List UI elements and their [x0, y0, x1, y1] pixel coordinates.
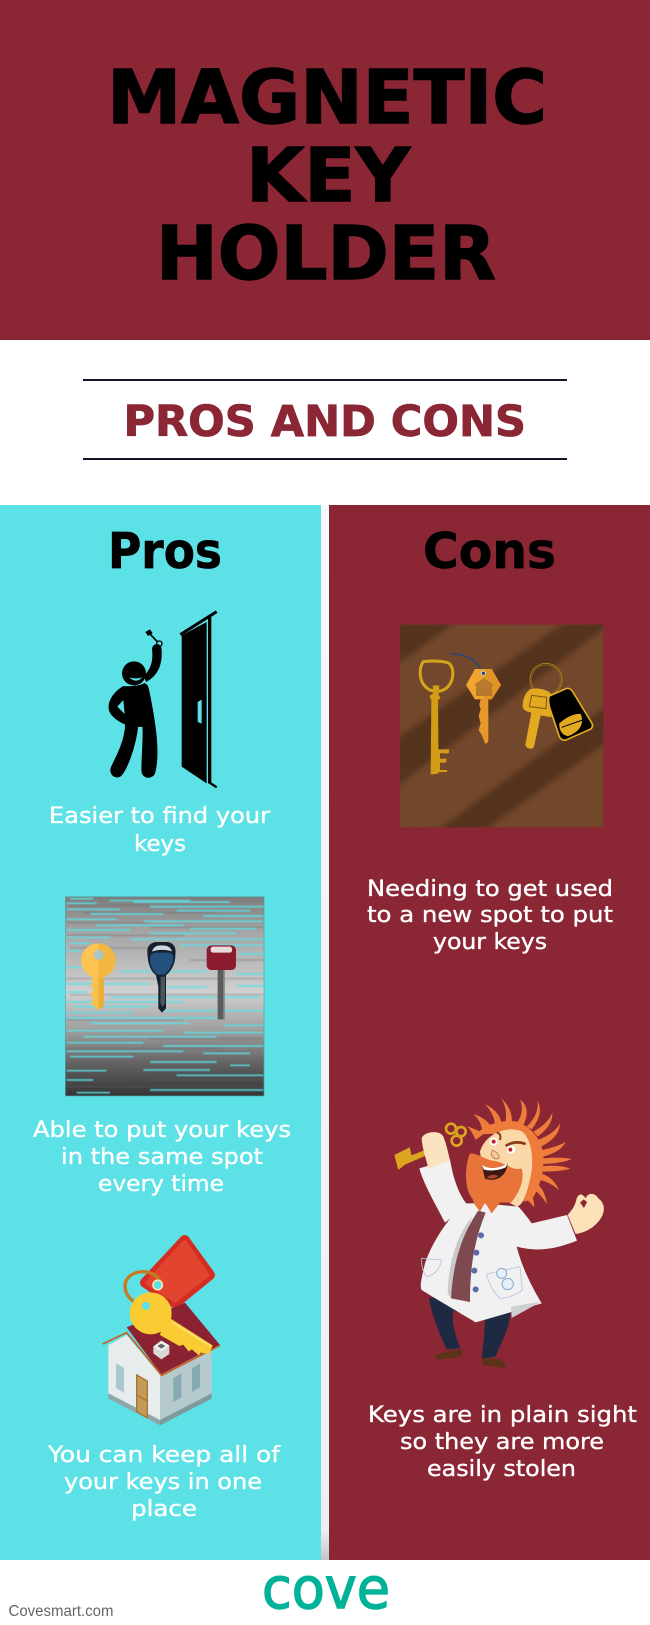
panel: pros: [0, 505, 321, 1560]
caption: getting used to a new spot: [367, 877, 613, 955]
caption: easier to find keys: keys: [134, 832, 186, 857]
illustration: mad scientist holding key: [394, 1099, 604, 1368]
heading: cons: Cons: [423, 523, 556, 580]
panel: cons: [329, 505, 650, 1560]
caption: keys more easily stolen: [368, 1403, 637, 1482]
website url: Covesmart.com: [8, 1603, 114, 1620]
image: keys on wood: [400, 624, 604, 828]
title text: [107, 55, 547, 297]
house: [103, 1303, 220, 1425]
legs and shoes: [429, 1297, 511, 1368]
icon: house with key and tag: [103, 1240, 220, 1425]
icon: yellow key: [81, 943, 116, 1010]
heading: pros: Pros: [108, 523, 222, 580]
title text: KEY: [246, 133, 411, 219]
caption: getting used to a new spot: to a new spot to put: [367, 903, 613, 928]
tag: [145, 1240, 210, 1303]
icon: car key with fob: [523, 663, 593, 749]
key ring: [125, 1272, 161, 1306]
logo: cove: cove: [262, 1556, 390, 1622]
caption: getting used to a new spot: your keys: [433, 930, 547, 955]
caption: keep keys in one place: your keys in one: [64, 1470, 262, 1495]
caption: keep keys in one place: place: [131, 1497, 197, 1522]
caption: easier to find keys: Easier to find your: [49, 804, 271, 829]
icon: person reaching with key beside door: [109, 612, 217, 787]
caption: keys more easily stolen: so they are more: [400, 1430, 604, 1455]
caption: keys more easily stolen: easily stolen: [427, 1457, 576, 1482]
title text: MAGNETIC: [107, 55, 547, 141]
caption: easier to find keys: [49, 804, 271, 857]
caption: keep keys in one place: You can keep all of: [47, 1443, 281, 1468]
subtitle: pros and cons: PROS AND CONS: [124, 398, 526, 447]
title text: HOLDER: [156, 211, 496, 297]
image: keys on brushed metal: [65, 897, 264, 1096]
hair spikes: [467, 1099, 572, 1207]
head and beard: [466, 1129, 532, 1213]
column gutter: [321, 505, 329, 1560]
caption: same spot every time: in the same spot: [61, 1145, 263, 1170]
caption: same spot every time: Able to put your keys: [33, 1118, 291, 1143]
caption: keys more easily stolen: Keys are in plain sight: [368, 1403, 637, 1428]
lab coat: [419, 1159, 577, 1322]
right hand: [568, 1194, 604, 1234]
icon: blue car key: [147, 942, 176, 1013]
icon: house key: [450, 654, 501, 744]
caption: same spot every time: every time: [98, 1172, 224, 1197]
title banner: [0, 0, 650, 340]
caption: same spot every time: [33, 1118, 291, 1197]
icon: red key: [207, 945, 236, 1019]
hand and key: [394, 1124, 466, 1170]
caption: keep keys in one place: [47, 1443, 281, 1522]
footer: [8, 1556, 390, 1622]
icon: antique key: [420, 661, 453, 775]
key: [130, 1292, 213, 1355]
caption: getting used to a new spot: Needing to get used: [367, 877, 613, 902]
